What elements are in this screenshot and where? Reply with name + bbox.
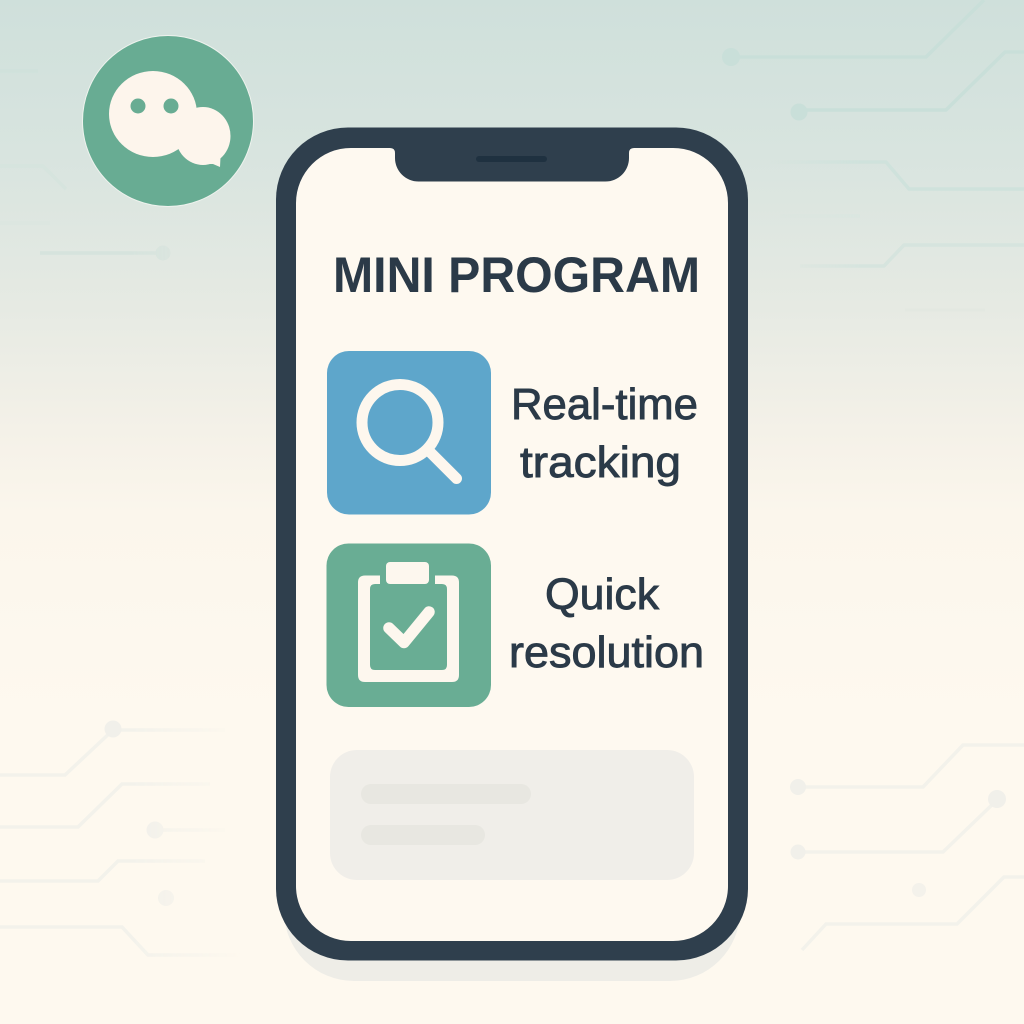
phone shadow: [284, 160, 740, 981]
phone speaker: [476, 156, 547, 162]
phone body: [276, 128, 748, 960]
circuit traces: lower right: [790, 745, 1024, 950]
title: MINI PROGRAM: [333, 246, 700, 303]
label: real-time tracking: tracking: [520, 438, 681, 487]
label: quick resolution: Quick: [545, 570, 660, 619]
icon: chat app badge: [82, 36, 254, 206]
icon: magnifier: [362, 384, 456, 478]
icon: search tile: [327, 351, 491, 514]
phone: [276, 128, 748, 960]
placeholder line two: [361, 825, 485, 845]
circuit traces: upper left: [40, 250, 165, 260]
circuit traces: upper right: [722, 36, 1024, 268]
phone screen: [296, 148, 728, 941]
icon: chat bubbles: [109, 71, 230, 167]
circuit traces: lower left: [0, 720, 166, 956]
label: quick resolution: [509, 570, 704, 677]
icon: clipboard tile: [326, 544, 491, 707]
placeholder card: [330, 750, 694, 880]
label: real-time tracking: [511, 380, 698, 487]
label: real-time tracking: Real-time: [511, 380, 698, 429]
placeholder line one: [361, 784, 531, 804]
label: quick resolution: resolution: [509, 628, 704, 677]
icon: clipboard: [358, 562, 459, 682]
